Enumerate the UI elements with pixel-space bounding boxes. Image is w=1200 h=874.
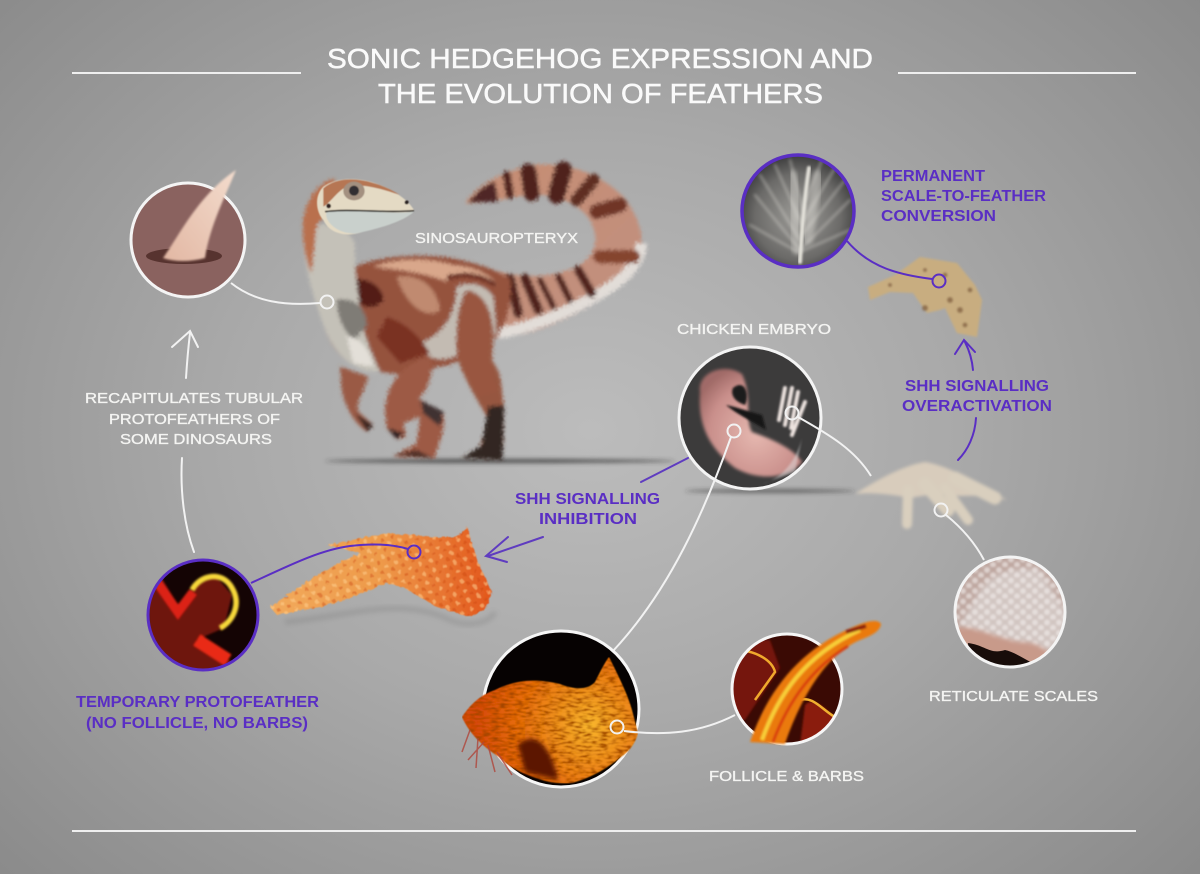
connector: embryo to follicle-and-barbs skin <box>613 424 740 651</box>
head <box>317 179 414 234</box>
illustration: orange limb with temporary protofeathers <box>270 527 495 624</box>
illustration: Sinosauropteryx dinosaur <box>303 164 642 460</box>
circle: permanent feather <box>742 155 854 267</box>
label: temporary protofeather <box>76 694 319 732</box>
label: SHH signalling inhibition <box>515 491 660 528</box>
title <box>327 43 873 109</box>
label: permanent scale-to-feather conversion: PERMANENT <box>881 168 985 185</box>
arrow: protofeather to tubular spike <box>172 331 198 552</box>
label: reticulate scales: RETICULATE SCALES <box>929 688 1098 705</box>
arrow: pale foot to feathered foot, SHH overactivation <box>955 340 976 460</box>
title: THE EVOLUTION OF FEATHERS <box>378 78 823 109</box>
label: SHH signalling inhibition: INHIBITION <box>539 511 637 528</box>
label: SHH signalling overactivation: SHH SIGNALLING <box>905 378 1049 395</box>
near leg <box>385 357 444 458</box>
neck and chest <box>303 225 380 372</box>
label: permanent scale-to-feather conversion: SCALE-TO-FEATHER <box>881 188 1046 205</box>
connector: protofeather circle to dinosaur neck <box>231 283 334 308</box>
circle: chicken embryo <box>679 347 821 489</box>
connector: feather circle to feathered foot <box>847 241 946 288</box>
label: follicle and barbs: FOLLICLE & BARBS <box>709 768 864 785</box>
label: recapitulates tubular protofeathers: PROTOFEATHERS OF <box>109 411 280 428</box>
rear hind leg <box>457 337 504 460</box>
far leg <box>340 367 373 432</box>
circle: reticulate scales <box>955 557 1070 670</box>
illustration: feathered foot <box>868 257 982 337</box>
label: SHH signalling inhibition: SHH SIGNALLING <box>515 491 660 508</box>
label: SHH signalling overactivation: OVERACTIVATION <box>902 398 1052 415</box>
label: temporary protofeather: (NO FOLLICLE, NO BARBS) <box>86 715 308 732</box>
body <box>322 256 511 374</box>
label: permanent scale-to-feather conversion <box>881 168 1046 225</box>
circle: skin with follicle and barbs <box>462 631 639 787</box>
label: Sinosauropteryx: SINOSAUROPTERYX <box>415 230 578 247</box>
label: SHH signalling overactivation <box>902 378 1052 415</box>
arrow: embryo to limb, SHH inhibition <box>486 458 688 562</box>
circle: temporary protofeather microscopy <box>148 560 258 680</box>
illustration: pale chicken foot <box>855 462 1007 524</box>
label: permanent scale-to-feather conversion: CONVERSION <box>881 208 996 225</box>
circle: tubular protofeather <box>131 170 245 297</box>
tail <box>465 164 642 338</box>
label: recapitulates tubular protofeathers <box>85 390 303 448</box>
connector: skin to follicle circle <box>610 715 735 734</box>
label: chicken embryo: CHICKEN EMBRYO <box>677 321 831 338</box>
label: recapitulates tubular protofeathers: RECAPITULATES TUBULAR <box>85 390 303 407</box>
connector: protofeather circle to limb <box>251 545 420 583</box>
circle: follicle and barbs microscopy <box>730 621 881 745</box>
label: recapitulates tubular protofeathers: SOME DINOSAURS <box>120 431 272 448</box>
connector: embryo foot to pale foot and reticulate scales <box>786 406 984 560</box>
ground shadows <box>325 459 855 493</box>
title: SONIC HEDGEHOG EXPRESSION AND <box>327 43 873 74</box>
label: temporary protofeather: TEMPORARY PROTOFEATHER <box>76 694 319 711</box>
